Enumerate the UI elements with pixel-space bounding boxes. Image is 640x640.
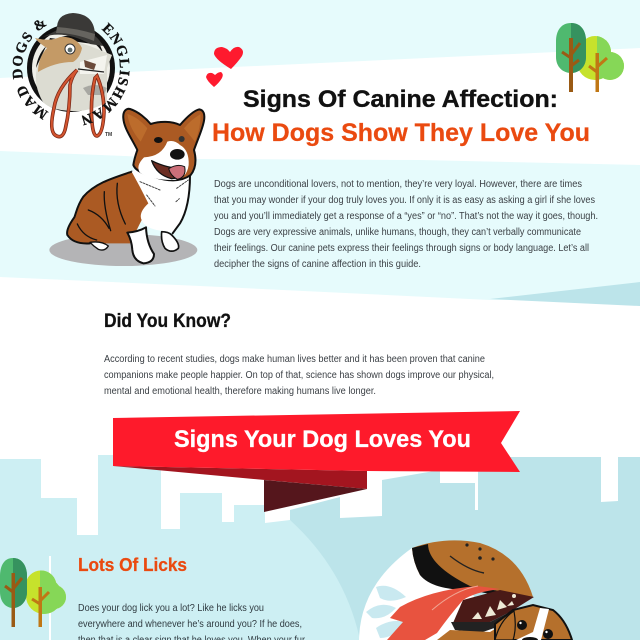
intro paragraph: that you may wonder if your dog truly loves you. If only it is as easy as asking a girl if she loves <box>214 195 595 206</box>
corgi white muzzle <box>138 141 189 180</box>
icon: red hearts <box>206 47 243 87</box>
beagle tongue <box>387 586 500 640</box>
ribbon banner <box>113 411 520 512</box>
corgi head <box>123 109 204 180</box>
logo red leash <box>52 70 104 137</box>
corgi front leg <box>127 227 154 263</box>
background: header bands <box>0 0 640 320</box>
did you know paragraph: mental and emotional health, therefore making humans live longer. <box>104 386 376 397</box>
title: How Dogs Show They Love You <box>212 119 590 147</box>
logo: Mad Dogs & Englishman <box>12 13 130 138</box>
logo circular text: MAD DOGS & <box>12 20 49 120</box>
intro paragraph: Dogs are unconditional lovers, not to mention, they’re very loyal. However, there are times <box>214 179 582 190</box>
lots of licks paragraph: everywhere and whenever he’s around you? If he does, <box>78 619 302 630</box>
lots of licks paragraph <box>78 603 306 640</box>
title <box>212 86 590 147</box>
intro paragraph: Dogs are very expressive animals, unlike humans, though, they can’t verbally communicate <box>214 227 581 238</box>
illustration: corgi <box>49 109 204 266</box>
beagle white circle <box>359 548 500 640</box>
corgi body <box>67 172 150 243</box>
beagle upper jaw <box>412 540 533 597</box>
banner heading: Signs Your Dog Loves You <box>174 426 471 453</box>
corgi chest <box>132 168 190 233</box>
background: city skyline <box>0 455 640 640</box>
corgi mouth and tongue <box>152 161 185 179</box>
icon: trees top right <box>556 23 624 92</box>
intro paragraph: their feelings. Our canine pets express their feelings through signs or body language. Let’s all <box>214 243 589 254</box>
did you know paragraph: According to recent studies, dogs make human lives better and it has been proven that canine <box>104 354 485 365</box>
logo bulldog face <box>35 37 112 111</box>
did you know paragraph: companions make people happier. On top of that, science has shown dogs improve our physical, <box>104 370 494 381</box>
logo bowler hat <box>43 13 103 46</box>
heading: lots of licks: Lots Of Licks <box>78 555 187 575</box>
intro paragraph <box>214 179 598 270</box>
beagle lower jaw and head <box>437 626 500 640</box>
lick droplets <box>366 586 407 638</box>
corgi nose and eyes <box>170 149 185 160</box>
logo circular text: ENGLISHMAN <box>82 22 130 126</box>
corgi rear paw <box>90 242 108 250</box>
intro paragraph: decipher the signs of canine affection in this guide. <box>214 259 421 270</box>
title: Signs Of Canine Affection: <box>243 86 558 113</box>
intro paragraph: you and you’ll immediately get a response of a “yes” or “no”. That’s not the way it goes, though. <box>214 211 598 222</box>
logo circular text <box>12 20 130 138</box>
icon: trees left <box>0 558 66 627</box>
illustration: licking beagle <box>359 540 572 640</box>
heading: did you know: Did You Know? <box>104 311 231 332</box>
beagle teeth <box>472 594 516 619</box>
logo circular text: TM <box>105 132 112 138</box>
beagle mouth <box>453 590 534 623</box>
did you know paragraph <box>104 354 494 397</box>
lots of licks paragraph: Does your dog lick you a lot? Like he licks you <box>78 603 264 614</box>
